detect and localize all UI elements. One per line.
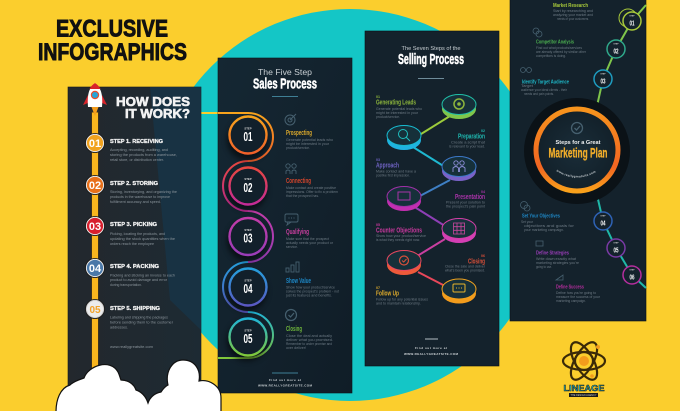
item: counter objections: Show how your product/service: [376, 234, 426, 238]
step ring 5: 05: [244, 331, 252, 346]
step ring 1: 01: [244, 129, 252, 144]
step 3: updating the stock quantities when the: [110, 237, 175, 241]
node 3: people: [442, 156, 476, 181]
item: counter objections: [376, 223, 426, 242]
icon: check circle: [286, 310, 296, 320]
item: generating leads: product/service.: [376, 115, 400, 119]
footer: find out more: Find out more at: [415, 346, 447, 350]
node 5: grid: [442, 218, 476, 243]
title: exclusive infographics: EXCLUSIVE: [56, 16, 168, 42]
item: approach: 03: [376, 158, 380, 162]
item: counter objections: Counter Objections: [376, 228, 422, 234]
item: preparation: Create a script that: [451, 140, 485, 144]
step ring 4: 04: [244, 281, 253, 296]
item: preparation: [449, 129, 485, 148]
step 5: Labeling and shipping the packages: [110, 316, 168, 320]
item: set your objectives: Set Your Objectives: [522, 214, 560, 220]
icon: people: [286, 164, 296, 174]
step 4: 04: [89, 263, 102, 275]
step 1: [85, 133, 177, 162]
item: qualifying: service.: [286, 245, 298, 249]
item: market research: Market Research: [553, 3, 589, 9]
step 5: before sending them to the customer: [110, 320, 174, 324]
footer: find out more: [258, 378, 312, 388]
step 5: addresses.: [110, 326, 128, 330]
item: generating leads: [376, 95, 422, 119]
item: market research: needs of your customers.: [557, 17, 589, 21]
item: approach: Make contact and have a: [376, 170, 416, 174]
node 03: 03: [600, 76, 606, 86]
title: exclusive infographics: INFOGRAPHICS: [38, 39, 187, 66]
item: market research: analyzing your market and: [553, 13, 593, 17]
heading: how does it work: HOW DOES: [116, 95, 190, 109]
item: define strategies: going to use.: [536, 265, 552, 269]
step 5: [85, 299, 174, 330]
step 3: STEP 3. PICKING: [110, 222, 157, 228]
item: closing: Closing: [286, 326, 302, 333]
item: identify target audience: Identify Target Audience: [522, 80, 569, 86]
item: show value: Show Value: [286, 278, 311, 285]
step 5: 05: [89, 305, 101, 316]
connector lines: [413, 116, 450, 287]
item: competitor analysis: [533, 28, 587, 58]
cloud: [56, 360, 221, 411]
item: presentation: [446, 190, 485, 208]
step 1: retail store, or distribution center.: [110, 158, 164, 162]
step 3: [85, 216, 175, 246]
step 4: [85, 258, 175, 287]
heading: how does it work: IT WORK?: [125, 107, 190, 121]
node 4: presentation: [387, 186, 421, 211]
item: define strategies: [536, 241, 579, 269]
step 2: [85, 175, 177, 204]
item: identify target audience: needs and pain points.: [524, 92, 554, 96]
item: closing: Close the sale and deliver: [445, 264, 486, 268]
item: show value: [285, 278, 339, 298]
item: competitor analysis: are already offered by similar other: [536, 50, 587, 54]
item: connecting: Make contact and create positive: [286, 186, 336, 190]
background teal circle: [154, 9, 546, 401]
heading: how does it work: [116, 95, 190, 121]
step ring 5: [227, 318, 267, 361]
item: preparation: Preparation: [458, 134, 485, 140]
rope line: [92, 112, 98, 374]
step 2: 02: [89, 180, 101, 192]
node 05: 05: [614, 246, 618, 254]
step ring 3: 03: [244, 230, 252, 246]
node 04: STEP: [600, 216, 606, 218]
item: follow up: Follow up for any potential issues: [376, 298, 428, 302]
item: follow up: 07: [376, 286, 380, 290]
item: prospecting: [286, 130, 333, 150]
item: prospecting: Prospecting: [286, 130, 312, 137]
step 1: 01: [89, 138, 101, 150]
item: closing: [286, 326, 333, 350]
footer: find out more: [404, 346, 458, 356]
step ring 4: STEP: [244, 278, 252, 282]
node 04: 04: [600, 218, 606, 228]
item: set your objectives: Set your: [521, 220, 534, 224]
item: presentation: Presentation: [455, 194, 485, 201]
item: define success: [556, 275, 601, 303]
item: identify target audience: audience your ideal clients - their: [521, 88, 568, 92]
item: set your objectives: [520, 202, 575, 232]
big circle: steps for a great marketing plan: [524, 98, 630, 204]
item: closing: Closing: [468, 258, 485, 266]
panel: selling process: [365, 31, 499, 366]
item: competitor analysis: Competitor Analysis: [536, 40, 574, 46]
title: exclusive infographics: [38, 16, 187, 66]
item: prospecting: might be interested in your: [286, 142, 330, 146]
step ring 1: [227, 116, 267, 160]
node 1: target: [442, 94, 476, 119]
node 06: STEP: [629, 270, 635, 272]
item: approach: [376, 158, 416, 178]
heading: seven steps: Selling Process: [398, 51, 464, 68]
step 4: during transportation.: [110, 283, 142, 287]
step ring 3: STEP: [244, 228, 252, 232]
heading: seven steps: The Seven Steps of the: [402, 46, 460, 52]
step ring 5: STEP: [244, 328, 252, 332]
item: approach: Approach: [376, 162, 399, 170]
item: closing: Close the deal and actually: [286, 334, 332, 338]
step 2: STEP 2. STORING: [110, 181, 158, 187]
item: closing: [445, 254, 486, 272]
item: follow up: and to maintain relationship.: [376, 302, 421, 306]
connector line between panels: [198, 112, 222, 114]
step ring 3: [227, 218, 267, 261]
item: closing: what's been you promised.: [445, 268, 485, 272]
node 01: STEP: [629, 16, 635, 18]
item: define success: marketing campaign.: [556, 299, 586, 303]
panel: marketing plan: [510, 0, 647, 322]
item: define strategies: Write down exactly what: [536, 257, 576, 261]
footer: find out more: Find out more at: [269, 378, 301, 382]
node 01: [619, 9, 641, 30]
big circle: steps for a great marketing plan: www.reallygreatsite.com: [556, 170, 596, 178]
item: define strategies: Define Strategies: [536, 250, 569, 256]
big circle: steps for a great marketing plan: Steps for a Great: [556, 140, 601, 146]
step 3: orders reach the employee: [110, 242, 154, 246]
item: presentation: Present your solution to: [446, 200, 485, 204]
step ring 4: [227, 268, 267, 311]
step 1: STEP 1. RECEIVING: [110, 139, 163, 145]
heading: five step sales process: Sales Process: [253, 76, 317, 92]
item: set your objectives: objectives and goals for: [524, 224, 575, 228]
step 4: STEP 4. PACKING: [110, 264, 159, 270]
node 01: 01: [630, 18, 634, 28]
timeline path: [597, 5, 646, 288]
item: show value: just its features and benefits.: [285, 294, 332, 298]
node 02: [607, 40, 625, 58]
item: preparation: 02: [481, 129, 485, 133]
item: define strategies: marketing strategies you're: [536, 261, 579, 265]
step 1: Accepting, recording, auditing, and: [110, 148, 168, 152]
logo: lineage: THE DESIGN AGENCY: [570, 394, 597, 397]
big circle: steps for a great marketing plan: Marketing Plan: [548, 144, 608, 160]
step 5: STEP 5. SHIPPING: [110, 306, 160, 312]
item: qualifying: Make sure that the prospect: [286, 237, 329, 241]
item: presentation: 04: [481, 190, 485, 194]
item: identify target audience: [520, 68, 569, 96]
item: show value: Show how your product/service: [286, 286, 335, 290]
logo: lineage: LINEAGE: [564, 383, 605, 393]
item: generating leads: might be interested in your: [376, 111, 419, 115]
item: define success: measure the success of your: [556, 295, 601, 299]
item: closing: 06: [481, 254, 485, 258]
item: market research: Start by researching and: [553, 9, 593, 13]
item: counter objections: is what they needs right now.: [376, 238, 420, 242]
item: prospecting: Generate potential leads who: [286, 138, 333, 142]
item: qualifying: [286, 229, 334, 249]
icon: target: [285, 114, 296, 125]
node 6: check: [387, 250, 421, 275]
node 06: 06: [630, 272, 634, 282]
item: set your objectives: your marketing campaign.: [524, 228, 564, 232]
node 05: STEP: [613, 242, 619, 244]
step ring 1: STEP: [244, 126, 252, 130]
item: define success: Define Success: [556, 284, 584, 290]
serpentine connector: [218, 113, 273, 358]
icon: rocket: [83, 83, 107, 116]
icon: speech bubble: [285, 214, 298, 225]
item: generating leads: 01: [376, 95, 380, 99]
panel: how does it work: [68, 83, 201, 405]
item: closing: over deliver!: [286, 346, 306, 350]
item: qualifying: actually needs your product or: [286, 241, 334, 245]
item: counter objections: 05: [376, 223, 380, 227]
item: identify target audience: Target: [521, 84, 533, 88]
item: connecting: [286, 178, 338, 198]
website link: www.reallygreatsite.com: [110, 345, 153, 349]
panel: sales process: [218, 58, 352, 393]
item: show value: solves the prospect's problem - not: [286, 290, 339, 294]
item: follow up: Follow Up: [376, 290, 399, 298]
heading: seven steps: [398, 46, 464, 68]
heading: five step sales process: [253, 68, 317, 92]
node 06: [623, 266, 641, 284]
node 7: chat: [442, 279, 476, 304]
step 2: Storing, inventorying, and organizing the: [110, 190, 177, 194]
item: closing: deliver what you promised.: [286, 338, 333, 342]
step ring 2: [227, 168, 267, 210]
step 1: storing the products from a warehouse,: [110, 153, 177, 157]
step 4: Packing and sticking an invoice to each: [110, 274, 175, 278]
item: follow up: [376, 286, 428, 306]
item: connecting: that the prospect has.: [286, 194, 319, 198]
item: connecting: impressions. Offer to fix a problem: [286, 190, 338, 194]
item: qualifying: Qualifying: [286, 229, 309, 236]
step 3: 03: [89, 221, 101, 233]
item: preparation: is relevant to your lead.: [449, 144, 485, 148]
step ring 2: STEP: [244, 177, 252, 181]
item: market research: [553, 3, 593, 21]
item: prospecting: product/service.: [286, 146, 310, 150]
item: connecting: Connecting: [286, 178, 311, 185]
item: generating leads: Generate potential leads who: [376, 107, 422, 111]
icon: bar chart: [286, 262, 299, 272]
item: closing: Remember to under promise and: [286, 342, 332, 346]
footer: find out more: WWW.REALLYGREATSITE.COM: [404, 352, 458, 356]
item: define success: Define how you're going to: [556, 291, 596, 295]
node 03: STEP: [600, 74, 606, 76]
item: presentation: the prospect's pain point: [446, 204, 485, 208]
step 3: Picking, locating the products, and: [110, 232, 165, 236]
step ring 2: 02: [244, 180, 252, 195]
footer: find out more: WWW.REALLYGREATSITE.COM: [258, 384, 312, 388]
heading: five step sales process: The Five Step: [258, 68, 313, 77]
step 4: product to avoid damage and error: [110, 278, 168, 282]
step 2: fulfillment accuracy and speed.: [110, 200, 161, 204]
item: competitor analysis: Find out what products/services: [536, 46, 582, 50]
node 05: [607, 239, 625, 257]
node 02: 02: [614, 46, 618, 56]
item: competitor analysis: competitors is doing.: [536, 54, 566, 58]
step 2: products in the warehouse to improve: [110, 195, 170, 199]
item: approach: positive first impression.: [376, 174, 410, 178]
item: generating leads: Generating Leads: [376, 100, 416, 106]
node 2: magnifier: [387, 126, 421, 150]
node 03: [594, 70, 612, 88]
logo: lineage: [563, 338, 605, 397]
node 04: [594, 212, 612, 230]
node 02: STEP: [613, 44, 619, 46]
